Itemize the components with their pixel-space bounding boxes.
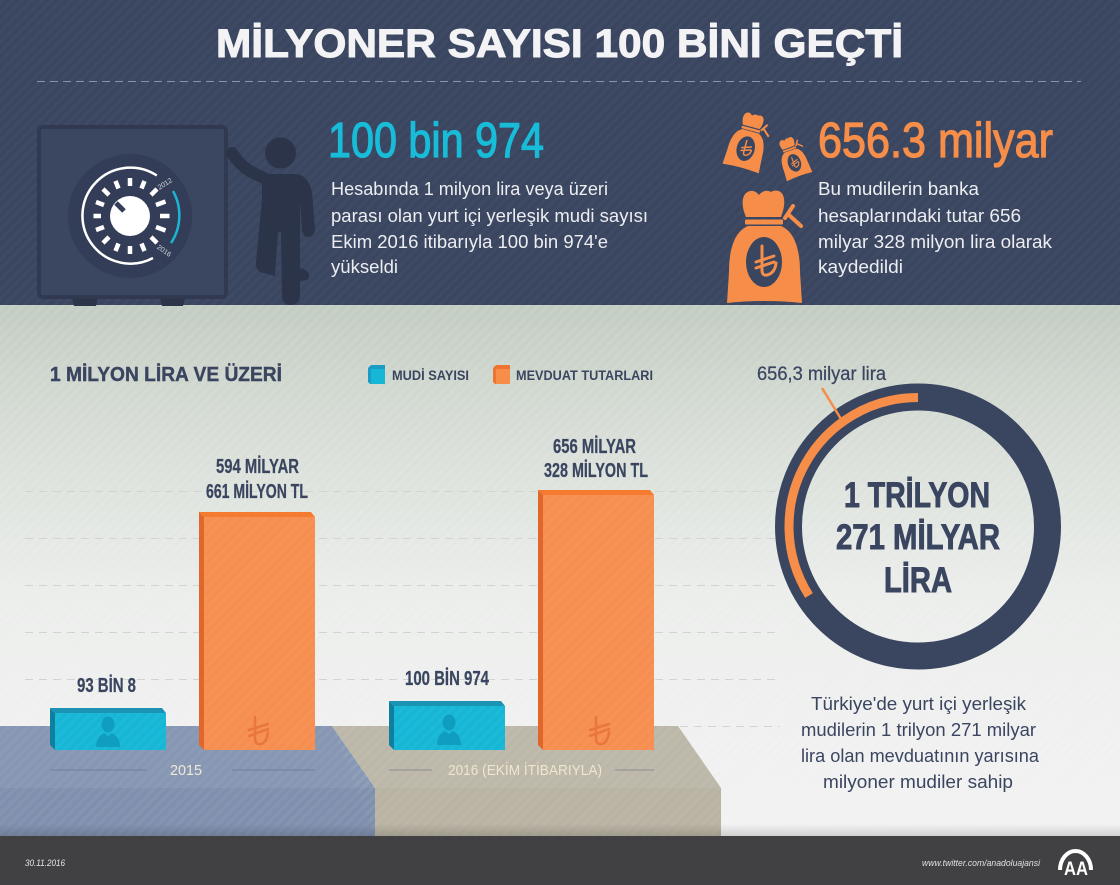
icon: lira	[590, 717, 609, 744]
orange share arc	[789, 398, 918, 596]
description: yükseldi	[331, 257, 398, 277]
stat block: depositors	[328, 114, 648, 277]
label: 594 milyar: 594 MİLYAR	[216, 455, 299, 478]
safe feet	[72, 298, 185, 306]
label: 656 milyar: 328 MİLYON TL	[544, 459, 648, 482]
safe dial: 2012	[157, 177, 174, 192]
safe dial	[68, 154, 192, 278]
legend item: depositor count: MUDİ SAYISI	[392, 368, 469, 383]
safe body	[39, 127, 226, 297]
icon: person	[437, 714, 461, 745]
date: 30.11.2016	[25, 858, 66, 869]
label: 656 milyar	[544, 435, 648, 482]
description: Hesabında 1 milyon lira veya üzeri	[331, 179, 608, 199]
description: hesaplarındaki tutar 656	[818, 206, 1021, 226]
label: 656 milyar: 656 MİLYAR	[553, 435, 636, 458]
legend item: depositor count	[368, 365, 469, 384]
total: LİRA	[884, 561, 952, 600]
description: Bu mudilerin banka	[818, 179, 980, 199]
donut caption	[801, 694, 1040, 792]
description: parası olan yurt içi yerleşik mudi sayısı	[331, 206, 648, 226]
donut caption: lira olan mevduatının yarısına	[801, 746, 1040, 766]
label: 594 milyar	[206, 455, 308, 503]
total: 271 MİLYAR	[836, 518, 1000, 557]
icon: lira	[249, 717, 268, 744]
donut caption: mudilerin 1 trilyon 271 milyar	[801, 720, 1036, 740]
year label: 2016: 2016 (EKİM İTİBARIYLA)	[448, 761, 602, 779]
title: MİLYONER SAYISI 100 BİNİ GEÇTİ	[216, 22, 903, 66]
legend item: deposit amounts	[493, 365, 653, 384]
platform: 2015	[0, 726, 375, 836]
footer	[0, 836, 1120, 885]
total	[836, 476, 1000, 600]
icon: money bags	[723, 109, 812, 303]
year label: 2015: 2015	[170, 762, 202, 779]
person silhouette	[232, 138, 315, 305]
icon: person	[96, 716, 120, 747]
stat block: deposits	[818, 114, 1053, 277]
illustration: safe with person	[39, 127, 315, 306]
description: kaydedildi	[818, 257, 903, 277]
label: 594 milyar: 661 MİLYON TL	[206, 480, 308, 503]
legend	[368, 365, 653, 384]
description: Ekim 2016 itibarıyla 100 bin 974'e	[331, 232, 608, 252]
legend item: deposit amounts: MEVDUAT TUTARLARI	[516, 368, 653, 383]
platform: 2016	[332, 726, 721, 836]
source url: www.twitter.com/anadoluajansi	[922, 858, 1041, 869]
arc label: 656,3 milyar lira	[757, 364, 886, 385]
donut caption: milyoner mudiler sahip	[823, 772, 1013, 792]
description: milyar 328 milyon lira olarak	[818, 232, 1053, 252]
bar: 2015 depositors	[50, 708, 166, 750]
bar: 2016 deposits	[538, 490, 654, 750]
donut chart	[757, 364, 1048, 656]
bar: 2016 depositors	[389, 701, 505, 750]
bar group: 2016	[389, 435, 654, 779]
ring	[788, 397, 1048, 656]
headline amount: 656.3 milyar	[818, 114, 1053, 168]
safe dial: 2016	[155, 244, 172, 259]
headline number: 100 bin 974	[328, 114, 544, 168]
description	[331, 179, 648, 277]
bar group: 2015	[50, 455, 315, 779]
chart heading: 1 MİLYON LİRA VE ÜZERİ	[50, 363, 282, 386]
label: 100 bin 974: 100 BİN 974	[405, 667, 490, 690]
label: 93 bin 8: 93 BİN 8	[77, 674, 136, 697]
total: 1 TRİLYON	[844, 476, 990, 515]
leader line	[822, 388, 841, 419]
description	[818, 179, 1053, 277]
donut caption: Türkiye'de yurt içi yerleşik	[811, 694, 1027, 714]
logo: AA: AA	[1064, 859, 1088, 880]
logo: AA	[1060, 851, 1091, 880]
bar: 2015 deposits	[199, 512, 315, 750]
